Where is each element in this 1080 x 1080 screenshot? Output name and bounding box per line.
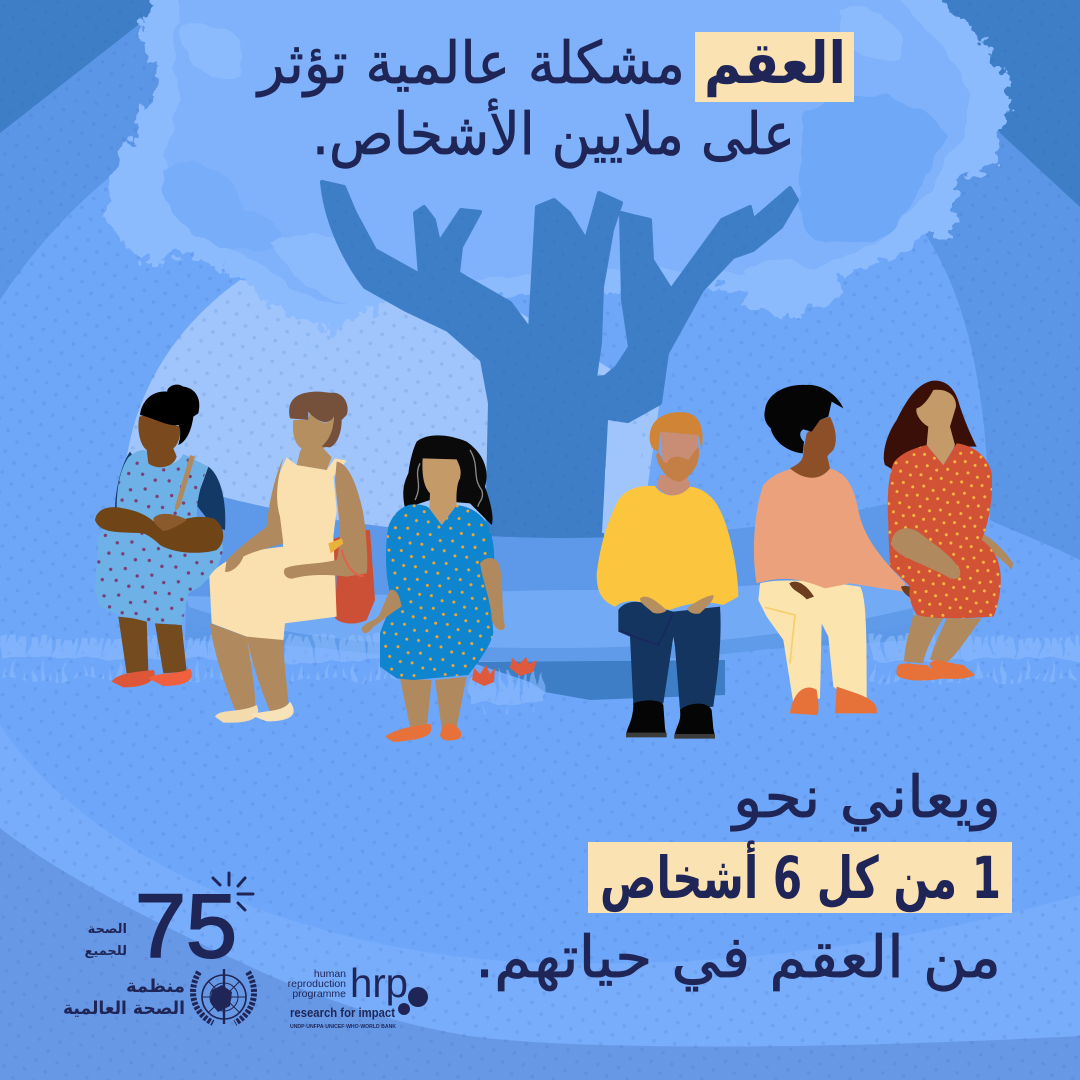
statistic callout: من العقم في حياتهم. bbox=[475, 923, 1001, 992]
logo: HRP: human bbox=[314, 968, 346, 980]
statistic callout: 1 من كل 6 أشخاص bbox=[600, 840, 1001, 913]
title bbox=[255, 29, 854, 169]
person 2: woman in cream dress with red bag bbox=[209, 392, 375, 723]
logo: HRP: UNDP·UNFPA·UNICEF·WHO·WORLD BANK bbox=[290, 1024, 396, 1030]
title: مشكلة عالمية تؤثر bbox=[255, 29, 685, 98]
WHO name: منظمة bbox=[126, 976, 185, 997]
logo: WHO emblem bbox=[193, 969, 254, 1024]
WHO name: الصحة العالمية bbox=[63, 998, 185, 1019]
circular bench bbox=[185, 488, 915, 700]
title: العقم bbox=[704, 29, 846, 97]
tree trunk bbox=[322, 182, 797, 540]
WHO name bbox=[63, 976, 185, 1019]
statistic callout: ويعاني نحو bbox=[730, 763, 1001, 832]
grass bbox=[0, 636, 1080, 714]
title: على ملايين الأشخاص. bbox=[312, 98, 795, 169]
person 4: man in yellow sweater bbox=[597, 412, 738, 739]
statistic callout bbox=[475, 763, 1012, 992]
person 3: woman in blue polka dress bbox=[362, 435, 505, 742]
logo: HRP: programme bbox=[292, 988, 346, 1000]
flowers bbox=[472, 657, 537, 686]
person 6: woman in red polka dress bbox=[884, 381, 1013, 681]
logo: HRP: research for impact bbox=[290, 1005, 396, 1020]
person 1: woman in light-blue polka dress bbox=[95, 385, 225, 687]
logo: HRP: reproduction bbox=[288, 978, 346, 990]
logo: HRP bbox=[288, 960, 428, 1030]
tree crown bbox=[103, 0, 1012, 330]
logo: WHO 75 health for all: 75 bbox=[135, 877, 237, 977]
logo: WHO 75 health for all: الصحة bbox=[88, 922, 127, 937]
person 5: woman in peach sweater bbox=[754, 385, 925, 715]
logo: WHO 75 health for all bbox=[85, 873, 253, 977]
logo: HRP: hrp bbox=[350, 960, 408, 1006]
logo: WHO 75 health for all: للجميع bbox=[85, 944, 127, 959]
